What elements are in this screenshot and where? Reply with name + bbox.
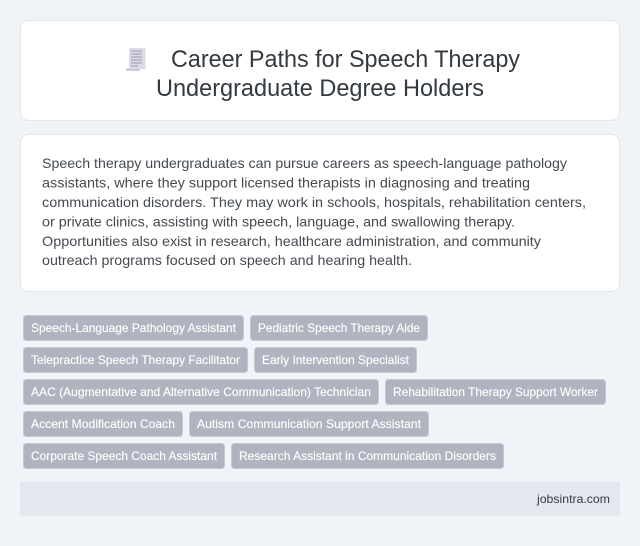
tag	[24, 316, 244, 340]
description text	[42, 155, 586, 268]
description text: Speech therapy undergraduates can pursue careers as speech-language pathology	[42, 155, 567, 171]
tag	[24, 412, 182, 436]
title	[156, 46, 520, 102]
tag: Pediatric Speech Therapy Aide	[258, 321, 420, 335]
tag: Accent Modification Coach	[31, 417, 175, 431]
footer bar	[20, 482, 620, 516]
tag: Rehabilitation Therapy Support Worker	[393, 385, 598, 399]
tag	[24, 348, 248, 372]
tag	[190, 412, 428, 436]
tag	[250, 316, 428, 340]
panel: title card	[20, 20, 620, 120]
tag: Research Assistant in Communication Disorders	[239, 449, 496, 463]
title: Undergraduate Degree Holders	[156, 75, 484, 102]
tag: Telepractice Speech Therapy Facilitator	[31, 353, 240, 367]
title: Career Paths for Speech Therapy	[171, 46, 520, 73]
icon: document scroll	[126, 48, 146, 71]
description text: or private clinics, assisting with speech, language, and swallowing therapy.	[42, 214, 515, 230]
tag: Early Intervention Specialist	[262, 353, 410, 367]
tag	[24, 444, 224, 468]
tag: Speech-Language Pathology Assistant	[31, 321, 237, 335]
description text: Opportunities also exist in research, healthcare administration, and community	[42, 233, 541, 249]
description text: outreach programs focused on speech and hearing health.	[42, 252, 412, 268]
tag: Autism Communication Support Assistant	[197, 417, 422, 431]
tag	[24, 380, 378, 404]
description text: communication disorders. They may work in schools, hospitals, rehabilitation centers,	[42, 194, 586, 210]
panel: description	[20, 134, 620, 292]
description text: assistants, where they support licensed therapists in diagnosing and treating	[42, 174, 530, 190]
footer source text: jobsintra.com	[536, 492, 610, 506]
tag	[232, 444, 504, 468]
tag	[386, 380, 606, 404]
tag: AAC (Augmentative and Alternative Communication) Technician	[31, 385, 371, 399]
tag: Corporate Speech Coach Assistant	[31, 449, 218, 463]
tag	[254, 348, 416, 372]
tag list	[24, 316, 606, 468]
